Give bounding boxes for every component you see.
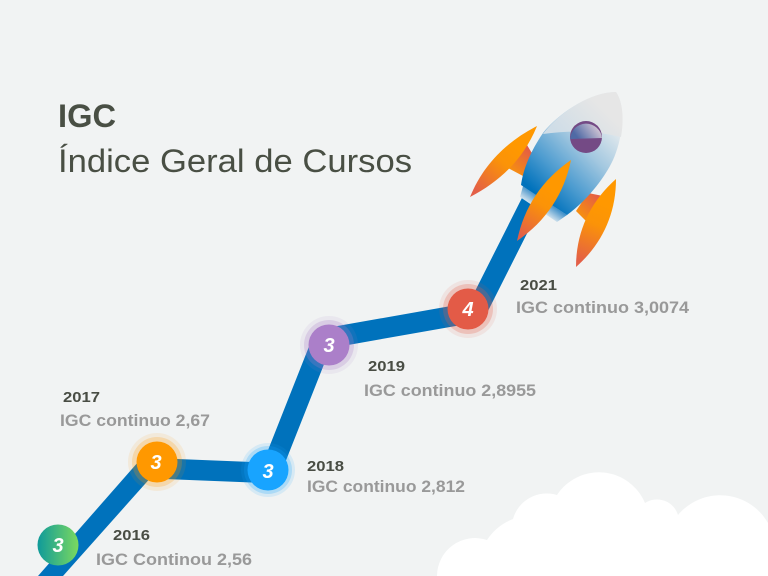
subtitle: Índice Geral de Cursos — [58, 143, 412, 179]
nozzle — [520, 186, 567, 222]
window — [570, 121, 602, 153]
node 2021 — [439, 280, 497, 338]
label 2018 — [307, 458, 465, 496]
label 2019 — [364, 358, 536, 400]
label 2021: 2021 — [520, 277, 557, 294]
label 2018: 2018 — [307, 458, 344, 475]
heading: IGC: IGC — [58, 98, 116, 134]
label 2016: 2016 — [113, 527, 150, 544]
right fin connector — [576, 193, 603, 223]
left fin — [470, 126, 537, 197]
node 2019 — [300, 316, 358, 374]
nose cone highlight — [543, 92, 623, 137]
node 2021: 4 — [461, 299, 474, 321]
node 2017 — [128, 433, 186, 491]
title — [58, 98, 412, 179]
label 2016: IGC Continou 2,56 — [96, 550, 252, 569]
label 2017: 2017 — [63, 389, 100, 406]
node 2016: 3 — [52, 535, 64, 557]
label 2018: IGC continuo 2,812 — [307, 477, 465, 496]
label 2019: IGC continuo 2,8955 — [364, 381, 536, 400]
label 2021 — [516, 277, 690, 317]
node 2017: 3 — [150, 452, 162, 474]
icon: rocket — [470, 92, 623, 267]
label 2016 — [96, 527, 252, 569]
right fin — [576, 179, 616, 267]
node 2016 — [38, 524, 78, 566]
node 2019: 3 — [323, 335, 335, 357]
node 2018 — [241, 443, 295, 497]
trajectory line — [38, 175, 545, 576]
left fin connector — [506, 145, 533, 176]
clouds — [437, 472, 768, 576]
label 2017 — [60, 389, 210, 430]
label 2019: 2019 — [368, 358, 405, 375]
node 2018: 3 — [262, 461, 274, 483]
middle fin — [517, 160, 571, 241]
label 2017: IGC continuo 2,67 — [60, 411, 210, 430]
body — [521, 92, 622, 215]
label 2021: IGC continuo 3,0074 — [516, 298, 690, 317]
